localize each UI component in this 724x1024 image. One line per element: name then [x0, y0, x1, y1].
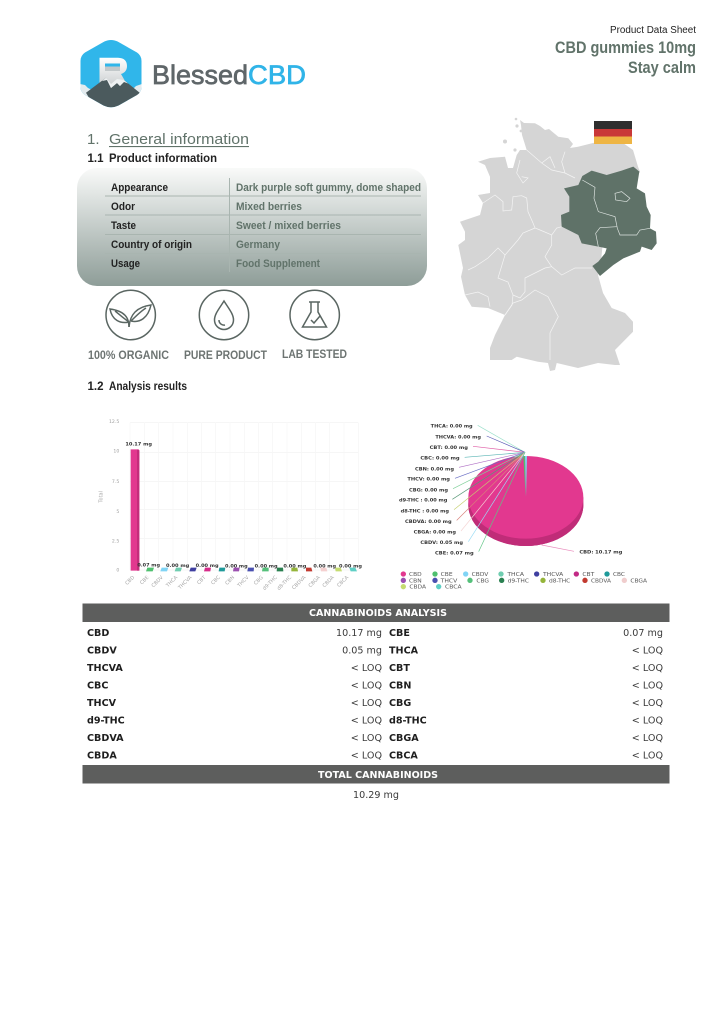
- row: CBDVA / CBGA: < LOQ: [632, 733, 663, 744]
- row: taste: Sweet / mixed berries: [236, 220, 341, 232]
- row: THCV / CBG: [87, 698, 663, 709]
- y axis labels: 7.5: [112, 479, 119, 485]
- row: CBDVA / CBGA: CBDVA: [87, 733, 124, 744]
- pie labels: THCA: 0.00 mg: [431, 424, 473, 430]
- table header: [82, 604, 670, 622]
- table header: CANNABINOIDS ANALYSIS: [309, 608, 447, 619]
- row: d9-THC / d8-THC: [87, 716, 663, 726]
- heading: General information: General information: [109, 131, 249, 148]
- x axis labels: CBCA: [336, 574, 350, 589]
- pie labels: d9-THC : 0.00 mg: [399, 498, 447, 504]
- y axis labels: Total: [98, 491, 104, 504]
- legend: d8-THC: [549, 578, 570, 584]
- x axis labels: CBC: [210, 574, 222, 586]
- row: CBD / CBE: CBE: [389, 628, 410, 639]
- x axis labels: CBDV: [151, 574, 165, 589]
- heading: Product information: 1.1: [88, 153, 104, 165]
- legend: THCV: [440, 578, 457, 584]
- bar value labels: 10.17 mg: [125, 442, 152, 448]
- pie labels: CBDVA: 0.00 mg: [405, 519, 452, 525]
- row: THCV / CBG: < LOQ: [351, 698, 382, 709]
- x axis labels: CBE: [139, 575, 150, 586]
- row: CBDV / THCA: [87, 646, 663, 656]
- row: taste: Taste: [111, 220, 136, 232]
- row: usage: [111, 258, 320, 270]
- pie labels: CBC: 0.00 mg: [420, 456, 460, 462]
- pie labels: CBD: 10.17 mg: [579, 550, 622, 556]
- logo: BlessedCBD: CBD: [248, 60, 306, 90]
- row: CBDA / CBCA: < LOQ: [632, 750, 663, 762]
- heading: General information: 1.: [87, 131, 100, 148]
- bar value labels: 0.00 mg: [225, 563, 248, 569]
- total header: [82, 765, 670, 784]
- map: grey states: [458, 118, 640, 371]
- row: d9-THC / d8-THC: < LOQ: [351, 716, 382, 726]
- legend: THCVA: [542, 572, 563, 578]
- icon: lab tested: LAB TESTED: [282, 349, 347, 361]
- pie labels: d8-THC : 0.00 mg: [401, 508, 449, 514]
- legend: CBDA: [409, 585, 426, 591]
- total header: TOTAL CANNABINOIDS: [318, 770, 438, 781]
- legend: CBD: [409, 572, 422, 578]
- row: THCV / CBG: < LOQ: [632, 698, 663, 709]
- row: CBC / CBN: CBN: [389, 680, 411, 692]
- x axis labels: d9-THC: [262, 574, 279, 592]
- pie labels: CBDV: 0.05 mg: [420, 540, 463, 546]
- x axis labels: CBDVA: [291, 574, 308, 591]
- row: CBD / CBE: 0.07 mg: [623, 628, 663, 639]
- row: CBC / CBN: < LOQ: [351, 680, 382, 692]
- legend: d9-THC: [508, 578, 529, 584]
- icon: hexagon with R and mountain: [80, 38, 142, 110]
- icon: pure product: PURE PRODUCT: [184, 350, 267, 362]
- row: CBDA / CBCA: CBCA: [389, 750, 418, 762]
- row: appearance: Dark purple soft gummy, dome shaped: [236, 182, 421, 194]
- row: d9-THC / d8-THC: d9-THC: [87, 716, 125, 726]
- pie labels: CBT: 0.00 mg: [430, 445, 468, 451]
- legend: CBE: [441, 572, 453, 578]
- row: CBC / CBN: < LOQ: [632, 680, 663, 692]
- pie labels: THCVA: 0.00 mg: [435, 435, 481, 441]
- pie labels: THCV: 0.00 mg: [407, 477, 450, 483]
- document header: CBD gummies 10mg: [555, 38, 696, 57]
- total value: 10.29 mg: [353, 790, 399, 801]
- bar value labels: 0.00 mg: [313, 563, 336, 569]
- heading: Analysis results: Analysis results: [109, 381, 187, 393]
- icon: German flag: [594, 121, 632, 144]
- x axis labels: THCA: [164, 574, 179, 589]
- bar value labels: 0.00 mg: [196, 563, 219, 569]
- y axis labels: [98, 419, 119, 574]
- row: CBDA / CBCA: < LOQ: [351, 750, 382, 762]
- row: CBDVA / CBGA: [87, 733, 663, 744]
- row: CBD / CBE: [87, 628, 663, 639]
- row: CBC / CBN: [87, 680, 663, 692]
- y axis labels: 10: [113, 448, 119, 454]
- map: state borders: [465, 150, 592, 360]
- x axis labels: CBD: [124, 575, 136, 587]
- panel: product information table: [77, 168, 427, 286]
- wordmark: Blessed: [152, 60, 248, 90]
- row: CBDV / THCA: 0.05 mg: [342, 646, 382, 656]
- legend: CBT: [582, 572, 595, 578]
- row: CBDV / THCA: < LOQ: [632, 646, 663, 656]
- icon: pure product: [184, 290, 267, 362]
- pie labels: CBGA: 0.00 mg: [414, 530, 456, 536]
- legend: CBN: [409, 578, 422, 584]
- row: country of origin: Country of origin: [111, 239, 192, 251]
- row: CBDVA / CBGA: < LOQ: [351, 733, 382, 744]
- legend: CBC: [613, 572, 625, 578]
- legend: [401, 571, 647, 591]
- pie labels: CBG: 0.00 mg: [409, 487, 448, 493]
- row: usage: Food Supplement: [236, 258, 320, 270]
- icon: lab tested: [282, 290, 347, 361]
- row: country of origin: [111, 239, 281, 251]
- x axis labels: THCV: [236, 574, 251, 589]
- row: d9-THC / d8-THC: < LOQ: [632, 716, 663, 726]
- row: THCV / CBG: CBG: [389, 698, 411, 709]
- row: CBDVA / CBGA: CBGA: [389, 733, 419, 744]
- bar value labels: 0.00 mg: [166, 563, 189, 569]
- legend: CBCA: [445, 585, 462, 591]
- legend: CBGA: [630, 578, 647, 584]
- heading: Product information: Product information: [109, 153, 217, 165]
- y axis labels: 2.5: [112, 539, 119, 545]
- row: CBDA / CBCA: CBDA: [87, 750, 117, 762]
- row: odor: Odor: [111, 201, 136, 213]
- pie labels: CBN: 0.00 mg: [415, 466, 454, 472]
- row: appearance: [111, 182, 421, 194]
- bar value labels: 0.07 mg: [137, 562, 160, 568]
- bar value labels: 0.00 mg: [283, 563, 306, 569]
- row: THCVA / CBT: < LOQ: [351, 663, 382, 674]
- heading: Analysis results: 1.2: [88, 381, 104, 393]
- bar value labels: 0.00 mg: [339, 563, 362, 569]
- document header: [555, 25, 696, 77]
- pie body: [468, 456, 583, 546]
- bar chart: cannabinoid totals: [98, 419, 362, 592]
- x axis labels: CBGA: [308, 574, 322, 589]
- row: THCVA / CBT: THCVA: [87, 663, 123, 674]
- legend: THCA: [506, 572, 524, 578]
- row: odor: [111, 201, 302, 213]
- row: taste: [111, 220, 341, 232]
- row: CBDV / THCA: THCA: [389, 646, 419, 656]
- document header: Stay calm: [628, 58, 696, 77]
- x axis labels: CBDA: [322, 574, 336, 589]
- bars: [131, 449, 357, 571]
- row: THCVA / CBT: CBT: [389, 663, 410, 674]
- leader lines: [452, 425, 574, 552]
- x axis labels: [124, 574, 350, 592]
- x axis labels: THCVA: [177, 574, 194, 592]
- x axis labels: CBN: [224, 575, 236, 587]
- map: highlighted eastern states: [561, 167, 657, 276]
- y axis labels: 0: [116, 568, 119, 574]
- row: d9-THC / d8-THC: d8-THC: [389, 716, 427, 726]
- x axis labels: CBG: [253, 575, 265, 587]
- bar value labels: [125, 442, 362, 569]
- row: CBDV / THCA: CBDV: [87, 646, 117, 656]
- legend: CBDVA: [591, 578, 611, 584]
- y axis labels: 12.5: [109, 419, 119, 425]
- row: appearance: Appearance: [111, 182, 168, 194]
- icon: 100% organic: [88, 290, 169, 362]
- row: THCVA / CBT: [87, 663, 663, 674]
- row: CBD / CBE: CBD: [87, 628, 109, 639]
- pie labels: CBE: 0.07 mg: [435, 551, 474, 557]
- row: odor: Mixed berries: [236, 201, 302, 213]
- row: THCV / CBG: THCV: [87, 698, 117, 709]
- x axis labels: CBT: [196, 574, 208, 586]
- logo: BlessedCBD: [80, 38, 306, 110]
- row: THCVA / CBT: < LOQ: [632, 663, 663, 674]
- table: cannabinoids analysis: [82, 604, 670, 801]
- y axis labels: 5: [116, 509, 119, 515]
- row: CBDA / CBCA: [87, 750, 663, 762]
- row: CBC / CBN: CBC: [87, 680, 108, 692]
- row: CBD / CBE: 10.17 mg: [336, 628, 382, 639]
- legend: CBG: [476, 578, 489, 584]
- bar value labels: 0.00 mg: [255, 563, 278, 569]
- pie labels: [399, 424, 622, 557]
- row: country of origin: Germany: [236, 239, 281, 251]
- row: usage: Usage: [111, 258, 140, 270]
- map: Germany: [458, 118, 657, 371]
- pie chart: cannabinoid shares: [399, 424, 647, 591]
- x axis labels: d8-THC: [276, 574, 293, 592]
- legend: CBDV: [472, 572, 488, 578]
- icon: 100% organic: 100% ORGANIC: [88, 350, 169, 362]
- document header: Product Data Sheet: [610, 25, 696, 36]
